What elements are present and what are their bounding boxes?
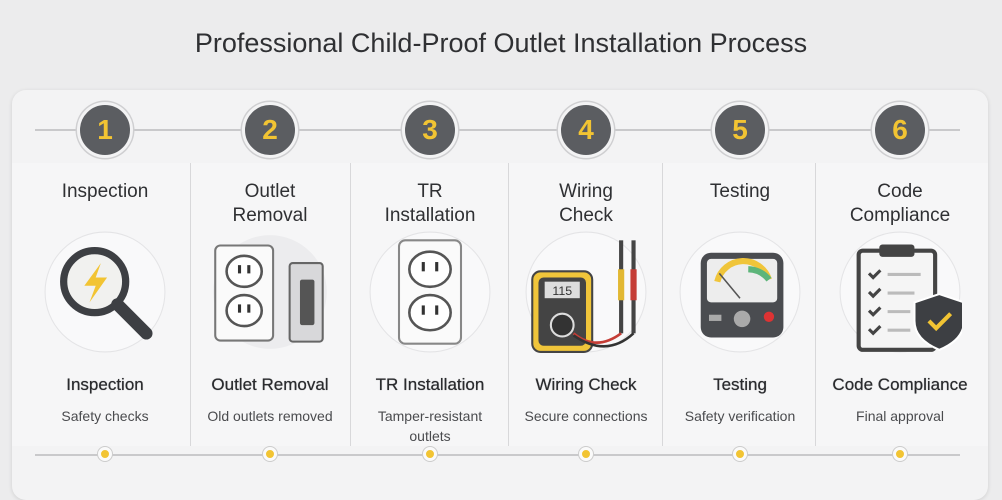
step numbers: 5 [732,114,748,145]
icon: clipboard shield [840,232,962,352]
labels: Final approval [856,408,944,424]
headings: Inspection [62,181,148,202]
headings: Removal [232,205,307,226]
labels: Wiring Check [535,375,637,394]
headings: Installation [385,205,475,226]
step numbers: 2 [262,114,278,145]
headings: Wiring [559,181,613,202]
labels [61,375,968,444]
labels: Safety verification [685,408,795,424]
title: Professional Child-Proof Outlet Installation Process [195,28,807,58]
labels: Safety checks [61,408,149,424]
labels: Secure connections [525,408,647,424]
labels: TR Installation [376,375,484,394]
labels: Old outlets removed [207,408,333,424]
step numbers: 3 [422,114,438,145]
labels: Inspection [66,375,144,394]
labels: Code Compliance [832,375,968,394]
icon: TR outlet [370,232,490,352]
step numbers: 6 [892,114,908,145]
step numbers [76,100,930,160]
labels: Tamper-resistant [378,408,482,424]
panel: process [12,90,988,500]
labels: Outlet Removal [211,375,329,394]
icon: tester gauge [680,232,800,352]
step numbers: 1 [97,114,113,145]
headings: Testing [710,181,770,202]
headings: TR [417,181,443,202]
labels: outlets [409,428,451,444]
timeline dots [97,446,908,462]
headings [62,181,950,226]
step numbers: 4 [578,114,594,145]
headings: Outlet [245,181,295,202]
icon: outlet removal [214,236,326,348]
icon: multimeter: 115 [552,284,572,298]
icon: magnifier [44,232,166,352]
icon: multimeter [526,232,646,353]
headings: Check [559,205,613,226]
headings: Compliance [850,205,950,226]
headings: Code [877,181,923,202]
labels: Testing [713,375,767,394]
